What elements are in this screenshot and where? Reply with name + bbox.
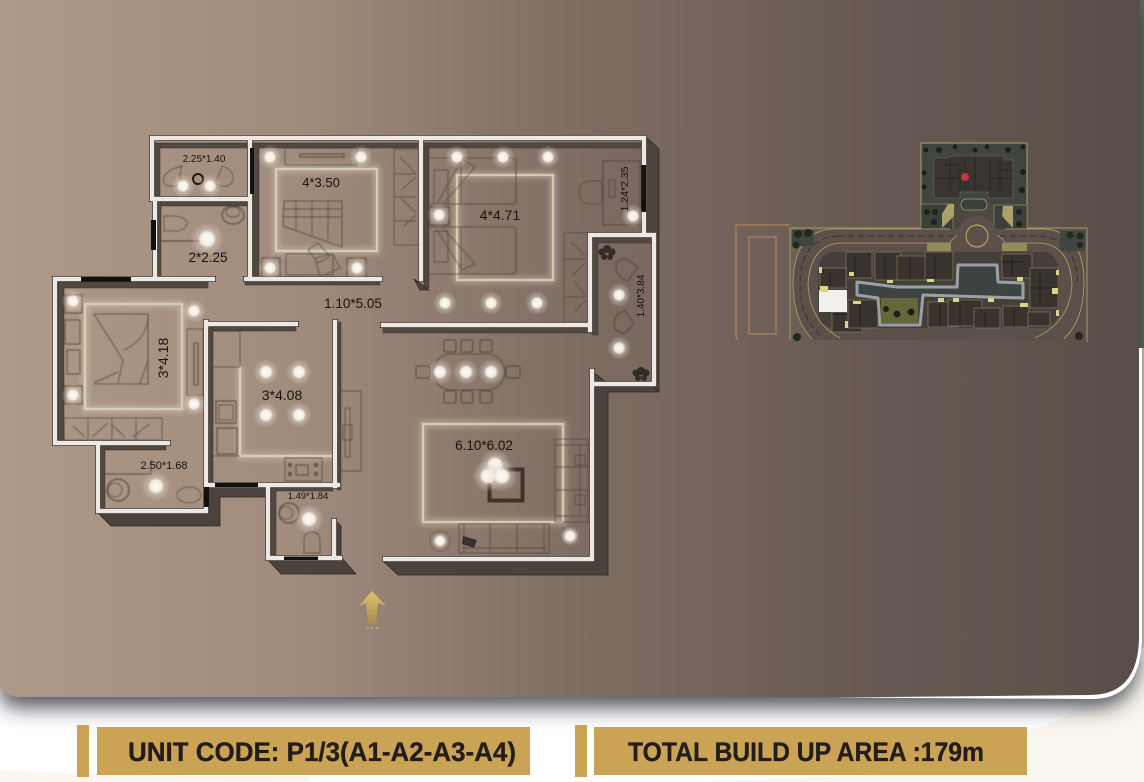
balcony chairs (614, 259, 638, 333)
white clubhouse block (819, 290, 847, 312)
left bath fixtures (105, 460, 151, 474)
outer 3D wall faces (98, 136, 659, 575)
left bedroom wardrobe (64, 418, 162, 440)
panel: total build up area (575, 725, 1027, 777)
floor plan (55, 136, 659, 575)
panel: unit code: UNIT CODE: P1/3(A1-A2-A3-A4) (128, 737, 516, 767)
wall shadows (58, 143, 652, 555)
upper courtyard block (921, 143, 1027, 234)
room dimension labels: 2.25*1.40 (183, 154, 226, 165)
wardrobe 1 (394, 149, 419, 245)
road ring and roundabout (790, 216, 1087, 342)
panel: unit code (77, 725, 530, 777)
room dimension labels: 6.10*6.02 (455, 438, 513, 453)
central residential blocks (818, 252, 1059, 332)
dark furniture accents (193, 174, 650, 548)
dining set (433, 354, 505, 390)
windows (81, 148, 646, 560)
room dimension labels: 1.40*3.84 (636, 274, 647, 317)
panel edge highlight (832, 348, 1142, 699)
room dimension labels: 3*4.08 (262, 387, 302, 403)
room dimension labels: 3*4.18 (155, 338, 171, 378)
room dimension labels: 4*4.71 (480, 207, 520, 223)
room dimension labels: 1.24*2.35 (619, 166, 631, 211)
desk and chair (603, 161, 640, 225)
white walls (55, 138, 654, 559)
room dimension labels: 1.49*1.84 (288, 491, 328, 502)
garden (881, 298, 918, 323)
site plan (736, 143, 1087, 342)
tv console corridor (340, 391, 361, 471)
top bath fixtures (164, 216, 187, 231)
master bed (429, 158, 516, 274)
water feature (857, 265, 1023, 325)
room dimension labels: 1.10*5.05 (324, 296, 382, 311)
kitchen cabinets and hob (212, 331, 240, 367)
wardrobe 2 (564, 233, 590, 322)
panel: total build up area: TOTAL BUILD UP AREA :179m (628, 737, 984, 767)
room dimension labels: 4*3.50 (302, 175, 340, 190)
room dimension labels (140, 154, 647, 502)
room dimension labels: 2*2.25 (188, 250, 228, 265)
small bath fixtures (279, 503, 299, 523)
furniture line work (64, 148, 640, 553)
icon: entrance arrow (359, 591, 386, 629)
yellow-green accents (819, 267, 1059, 328)
corner planting (792, 229, 1085, 341)
room dimension labels: 2.50*1.68 (140, 460, 188, 472)
left bedroom bed (94, 314, 148, 384)
room light frames (85, 169, 563, 522)
balcony chairs and table (163, 166, 233, 186)
parking outline (736, 225, 790, 340)
sofa set (459, 524, 549, 553)
ceiling lights (61, 145, 645, 552)
bedroom 1 bed, storage, tv (285, 148, 357, 165)
